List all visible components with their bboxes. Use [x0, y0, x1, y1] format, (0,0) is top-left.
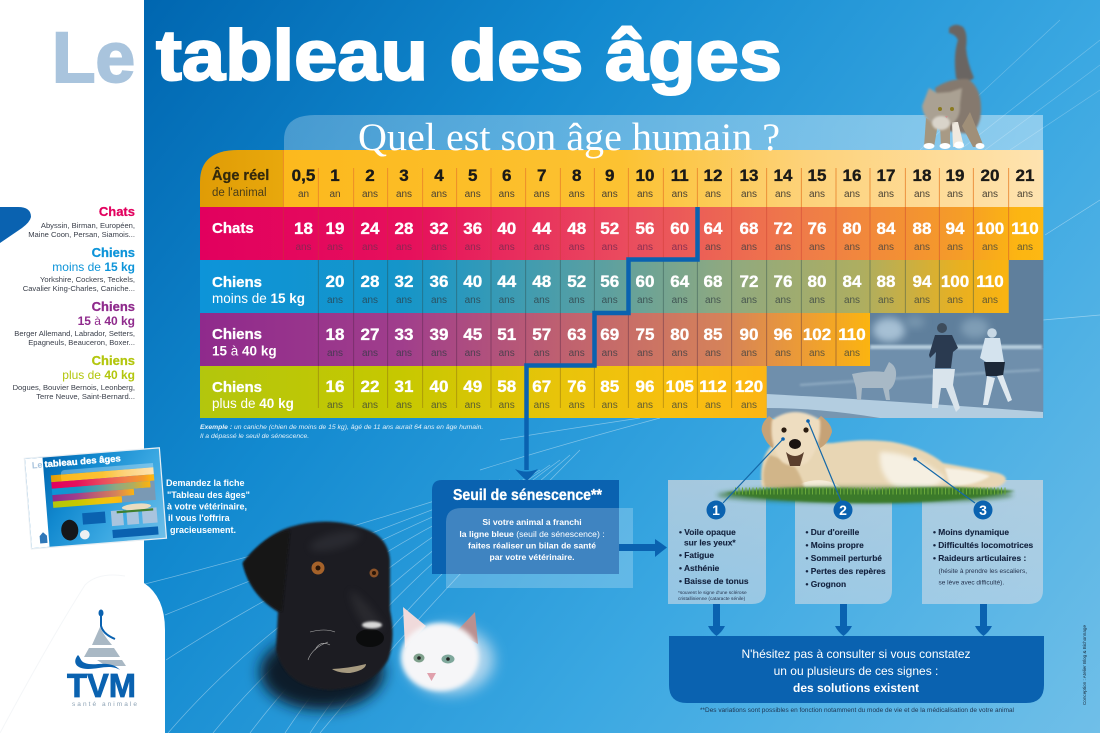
row: dogs 15 to 40 kg: 39 [430, 325, 448, 344]
row: dogs under 15 kg: 110 [976, 272, 1004, 291]
call to action text [166, 478, 250, 535]
panel: signs 1 [668, 480, 766, 604]
row: dogs 15 to 40 kg: 45 [463, 325, 482, 344]
legend item: dogs over 40 kg: Chiens [92, 353, 135, 368]
legend item: dogs 15 to 40 kg: Berger Allemand, Labrador, Setters, [14, 329, 135, 338]
header row: real age: 0,5 [292, 166, 315, 185]
arrow: signs 2 to advice [835, 604, 852, 636]
row: dogs 15 to 40 kg: ans [705, 348, 721, 359]
advice panel: un ou plusieurs de ces signes : [774, 664, 938, 678]
row: dogs 15 to 40 kg: ans [569, 348, 585, 359]
row: dogs under 15 kg: ans [947, 295, 963, 306]
legend tab [0, 207, 31, 243]
row: dogs 15 to 40 kg: ans [844, 348, 860, 359]
age table [200, 150, 1043, 418]
advice panel [669, 636, 1044, 703]
row: cats: 100 [976, 219, 1004, 238]
row: dogs under 15 kg: 40 [463, 272, 482, 291]
header row: real age: 8 [572, 166, 581, 185]
row: dogs over 40 kg: ans [569, 400, 585, 411]
header row: real age: ans [396, 189, 412, 200]
row: dogs under 15 kg: 28 [361, 272, 379, 291]
header row: real age: de l'animal [212, 187, 267, 199]
photo: white cat [401, 607, 494, 694]
row: dogs under 15 kg: 56 [600, 272, 619, 291]
row: dogs 15 to 40 kg: 80 [670, 325, 689, 344]
header row: real age: ans [637, 189, 653, 200]
row: dogs under 15 kg: ans [327, 295, 343, 306]
row: dogs under 15 kg: ans [878, 295, 894, 306]
row: cats: ans [982, 242, 998, 253]
row: cats: 60 [670, 219, 689, 238]
row: dogs under 15 kg: ans [705, 295, 721, 306]
table example note: Exemple : un caniche (chien de moins de 15 kg), âgé de 11 ans aurait 64 ans en âge humain. [200, 424, 483, 431]
row: cats: 44 [532, 219, 552, 238]
row: cats: 72 [774, 219, 792, 238]
legend item: cats: Maine Coon, Persan, Siamois... [28, 230, 135, 239]
row: cats: ans [809, 242, 825, 253]
header row: real age: an [329, 189, 341, 200]
header row: real age: 7 [537, 166, 546, 185]
row: dogs under 15 kg: ans [362, 295, 378, 306]
row: cats: 52 [600, 219, 619, 238]
legend item: cats: Chats [99, 204, 135, 219]
panel: signs 2 [795, 480, 892, 604]
row: dogs 15 to 40 kg: ans [534, 348, 550, 359]
row: cats: 19 [326, 219, 344, 238]
header row: real age: ans [431, 189, 447, 200]
header row: real age [200, 150, 1043, 207]
icon: tabby cat on the table [922, 25, 984, 149]
row: dogs 15 to 40 kg [200, 313, 870, 366]
row: dogs 15 to 40 kg: ans [602, 348, 618, 359]
row: dogs 15 to 40 kg: 33 [395, 325, 413, 344]
legend item: dogs over 40 kg: plus de 40 kg [62, 368, 135, 382]
arrow: threshold to signs [619, 539, 667, 557]
logo arc outline [0, 575, 125, 733]
header row: real age: ans [1017, 189, 1033, 200]
row: dogs under 15 kg: 20 [326, 272, 344, 291]
panel: signs 3: se lève avec difficulté). [938, 580, 1004, 586]
call to action text: à votre vétérinaire, [167, 502, 247, 512]
row: cats: 40 [497, 219, 516, 238]
panel: signs 3: • Raideurs articulaires : [933, 553, 1026, 563]
mini poster thumbnail: Le [31, 460, 43, 470]
header row: real age: 10 [636, 166, 654, 185]
row: dogs 15 to 40 kg: 85 [704, 325, 722, 344]
legend item: dogs under 15 kg [23, 245, 135, 293]
row: dogs under 15 kg: ans [465, 295, 481, 306]
row: dogs over 40 kg: ans [705, 400, 721, 411]
connector lines and number badge 3: 3 [979, 502, 987, 518]
logo: TVM [67, 610, 137, 708]
row: dogs under 15 kg: 48 [532, 272, 551, 291]
row: dogs over 40 kg: ans [431, 400, 447, 411]
row: cats: ans [844, 242, 860, 253]
row: dogs under 15 kg: 60 [636, 272, 654, 291]
row: dogs 15 to 40 kg: ans [362, 348, 378, 359]
header row: real age: ans [672, 189, 688, 200]
row: cats: 64 [704, 219, 723, 238]
row: dogs 15 to 40 kg: ans [465, 348, 481, 359]
row: dogs over 40 kg: ans [396, 400, 412, 411]
row: cats: 18 [294, 219, 313, 238]
row: dogs under 15 kg: 68 [704, 272, 722, 291]
mini poster thumbnail: tableau des âges [44, 453, 121, 469]
row: dogs under 15 kg: ans [844, 295, 860, 306]
row: dogs 15 to 40 kg: 63 [567, 325, 586, 344]
header row: real age: ans [705, 189, 721, 200]
row: dogs 15 to 40 kg: ans [775, 348, 791, 359]
row: cats: ans [396, 242, 412, 253]
legend item: dogs 15 to 40 kg: 15 à 40 kg [78, 314, 135, 328]
row: cats: 68 [740, 219, 758, 238]
row: dogs over 40 kg: 67 [532, 377, 551, 396]
panel: signs 1: • Baisse de tonus [679, 576, 749, 586]
table example note: Il a dépassé le seuil de sénescence. [200, 433, 309, 440]
header row: real age: ans [465, 189, 481, 200]
row: dogs over 40 kg: 120 [735, 377, 763, 396]
row: dogs over 40 kg: ans [362, 400, 378, 411]
row: dogs over 40 kg: ans [637, 400, 653, 411]
row: dogs 15 to 40 kg: ans [499, 348, 515, 359]
legend item: dogs over 40 kg [13, 353, 135, 401]
header row: real age: ans [569, 189, 585, 200]
photo: black dog [243, 522, 393, 710]
row: dogs under 15 kg: 80 [808, 272, 826, 291]
row: dogs under 15 kg: 36 [430, 272, 448, 291]
header row: real age: ans [741, 189, 757, 200]
panel: signs 1: *souvent le signe d'une sclérose [678, 590, 747, 596]
row: dogs under 15 kg: ans [499, 295, 515, 306]
row: cats: ans [295, 242, 312, 253]
legend item: cats [28, 204, 135, 239]
row: dogs under 15 kg: ans [914, 295, 930, 306]
header row: real age: 17 [877, 166, 895, 185]
header row: real age: 3 [399, 166, 409, 185]
connector lines and number badge 2: 2 [839, 502, 847, 518]
row: cats: ans [569, 242, 585, 253]
row: cats: ans [602, 242, 618, 253]
row: dogs 15 to 40 kg: ans [809, 348, 825, 359]
row: dogs 15 to 40 kg: 102 [803, 325, 831, 344]
legend item: dogs under 15 kg: Cavalier King-Charles, Caniche... [23, 284, 135, 293]
translucent panel behind subtitle [284, 115, 1043, 160]
row: dogs under 15 kg: ans [982, 295, 998, 306]
row: dogs over 40 kg: 58 [497, 377, 516, 396]
title: tableau des âges: tableau des âges [156, 17, 782, 96]
row: dogs 15 to 40 kg: 90 [740, 325, 758, 344]
panel: signs 3 [922, 480, 1043, 604]
row: cats: ans [465, 242, 481, 253]
row: dogs over 40 kg: ans [499, 400, 515, 411]
row: dogs under 15 kg: ans [741, 295, 757, 306]
row: dogs 15 to 40 kg: 57 [532, 325, 551, 344]
row: cats: ans [878, 242, 894, 253]
row: dogs under 15 kg: ans [396, 295, 412, 306]
panel: signs 1: cristallinienne (cataracte sénile) [678, 596, 746, 602]
advice panel: des solutions existent [793, 681, 919, 695]
panel: signs 1: • Voile opaque [679, 527, 736, 537]
row: dogs over 40 kg: 31 [395, 377, 413, 396]
senescence threshold panel: Seuil de sénescence** [453, 487, 603, 504]
row: dogs under 15 kg: ans [569, 295, 585, 306]
header row: real age: 16 [843, 166, 861, 185]
senescence threshold panel: par votre vétérinaire. [489, 552, 575, 562]
row: dogs under 15 kg: ans [809, 295, 825, 306]
header row: real age: 15 [808, 166, 826, 185]
row: dogs 15 to 40 kg: ans [396, 348, 412, 359]
row: dogs 15 to 40 kg: Chiens [212, 326, 262, 343]
connector lines and number badge 1: 1 [712, 502, 720, 518]
senescence threshold panel: la ligne bleue (seuil de sénescence) : [459, 529, 605, 539]
header row: real age: an [298, 189, 309, 200]
row: dogs over 40 kg: 85 [600, 377, 619, 396]
row: dogs under 15 kg: 100 [941, 272, 969, 291]
row: cats: ans [947, 242, 963, 253]
header row: real age: 11 [671, 166, 689, 185]
header row: real age: 21 [1016, 166, 1034, 185]
header row: real age: 5 [468, 166, 477, 185]
row: cats: Chats [212, 220, 254, 237]
row: dogs over 40 kg: 22 [361, 377, 379, 396]
row: cats: ans [362, 242, 378, 253]
row: cats [200, 207, 1043, 260]
header row: real age: ans [499, 189, 515, 200]
logo: TVM: TVM [67, 667, 136, 704]
row: dogs 15 to 40 kg: 18 [326, 325, 344, 344]
row: dogs under 15 kg: ans [534, 295, 550, 306]
row: dogs 15 to 40 kg: 75 [636, 325, 654, 344]
vertical credit: Conception : Atelier Blog & Bichonnage [1082, 625, 1087, 705]
row: dogs over 40 kg: 105 [666, 377, 694, 396]
row: dogs 15 to 40 kg: 51 [497, 325, 516, 344]
row: dogs over 40 kg: ans [602, 400, 618, 411]
row: dogs under 15 kg: 52 [567, 272, 586, 291]
header row: real age: ans [947, 189, 963, 200]
row: dogs 15 to 40 kg: 69 [600, 325, 619, 344]
row: dogs over 40 kg: ans [465, 400, 481, 411]
header row: real age: 18 [913, 166, 931, 185]
panel: signs 1: • Fatigue [679, 550, 714, 560]
header row: real age: 6 [502, 166, 511, 185]
row: dogs 15 to 40 kg: ans [327, 348, 343, 359]
row: cats: 110 [1011, 219, 1039, 238]
legend item: dogs 15 to 40 kg [14, 299, 135, 347]
header row: real age: 14 [774, 166, 793, 185]
row: cats: ans [672, 242, 688, 253]
row: cats: ans [1017, 242, 1033, 253]
panel: signs 1: • Asthénie [679, 563, 720, 573]
panel: signs 3: (hésite à prendre les escaliers, [938, 568, 1027, 575]
row: cats: 84 [877, 219, 896, 238]
row: dogs under 15 kg: 72 [740, 272, 758, 291]
row: cats: ans [534, 242, 550, 253]
row: dogs over 40 kg: 40 [430, 377, 448, 396]
row: dogs 15 to 40 kg: 96 [774, 325, 792, 344]
row: dogs under 15 kg: ans [637, 295, 653, 306]
row: dogs over 40 kg: plus de 40 kg [212, 396, 294, 411]
row: dogs over 40 kg: ans [672, 400, 688, 411]
call to action text: Demandez la fiche [166, 478, 245, 488]
header row: real age: ans [878, 189, 894, 200]
header row: real age: ans [809, 189, 825, 200]
legend item: dogs under 15 kg: Yorkshire, Cockers, Teckels, [40, 275, 135, 284]
row: dogs under 15 kg [200, 260, 1009, 313]
row: dogs over 40 kg: Chiens [212, 379, 262, 396]
row: dogs 15 to 40 kg: 110 [838, 325, 866, 344]
row: dogs under 15 kg: ans [602, 295, 618, 306]
row: dogs over 40 kg: ans [327, 400, 343, 411]
connector lines and number badge 3 [913, 457, 992, 520]
logo: TVM: santé animale [72, 701, 137, 708]
panel: signs 1: sur les yeux* [684, 538, 736, 548]
footnote: **Des variations sont possibles en fonction notamment du mode de vie et de la médicalisation de votre animal [700, 707, 1015, 714]
row: dogs over 40 kg: 96 [636, 377, 654, 396]
row: dogs over 40 kg [200, 366, 767, 418]
header row: real age: Âge réel [212, 166, 269, 184]
header row: real age: ans [844, 189, 860, 200]
header row: real age: 12 [704, 166, 722, 185]
row: dogs under 15 kg: 84 [843, 272, 862, 291]
row: cats: ans [775, 242, 791, 253]
row: cats: ans [705, 242, 721, 253]
row: cats: ans [914, 242, 930, 253]
blue senescence threshold line and arrow [515, 207, 698, 481]
row: dogs 15 to 40 kg: 27 [361, 325, 379, 344]
row: dogs 15 to 40 kg: ans [672, 348, 688, 359]
row: cats: 48 [567, 219, 586, 238]
row: dogs over 40 kg: 76 [567, 377, 586, 396]
call to action text: gracieusement. [170, 525, 236, 535]
row: cats: ans [741, 242, 757, 253]
row: dogs under 15 kg: ans [672, 295, 688, 306]
row: cats: 94 [946, 219, 965, 238]
panel: signs 2: • Moins propre [806, 540, 864, 550]
row: cats: ans [499, 242, 515, 253]
header row: real age: ans [534, 189, 550, 200]
row: dogs 15 to 40 kg: 15 à 40 kg [212, 344, 277, 358]
header row: real age: ans [914, 189, 930, 200]
header row: real age: ans [362, 189, 378, 200]
header row: real age: ans [982, 189, 998, 200]
header row: real age: 19 [946, 166, 964, 185]
row: dogs under 15 kg: 94 [913, 272, 932, 291]
row: dogs over 40 kg: ans [741, 400, 757, 411]
photo: runners and dog behind the table [766, 260, 1044, 420]
photo: golden dog on grass [717, 412, 1015, 503]
row: cats: ans [431, 242, 447, 253]
header row: real age: 13 [740, 166, 758, 185]
row: cats: 32 [430, 219, 448, 238]
panel: signs 2: • Dur d'oreille [806, 527, 860, 537]
row: cats: 88 [913, 219, 931, 238]
row: dogs under 15 kg: ans [431, 295, 447, 306]
white left panel [0, 0, 165, 733]
header row: real age: ans [775, 189, 791, 200]
row: dogs over 40 kg: 16 [326, 377, 344, 396]
legend item: dogs 15 to 40 kg: Chiens [92, 299, 135, 314]
panel: signs 3: • Difficultés locomotrices [933, 540, 1034, 550]
legend item: dogs 15 to 40 kg: Epagneuls, Beauceron, Boxer... [28, 338, 135, 347]
title: Le: Le [52, 19, 135, 98]
row: dogs 15 to 40 kg: ans [741, 348, 757, 359]
connector lines and number badge 1 [706, 437, 785, 520]
row: dogs under 15 kg: 32 [395, 272, 413, 291]
row: dogs under 15 kg: 44 [497, 272, 517, 291]
row: dogs under 15 kg: 64 [670, 272, 690, 291]
call to action text: il vous l'offrira [168, 513, 231, 523]
header row: real age: 1 [330, 166, 340, 185]
mini poster thumbnail [24, 447, 167, 549]
row: dogs 15 to 40 kg: ans [431, 348, 447, 359]
row: cats: 80 [843, 219, 861, 238]
senescence threshold panel [432, 480, 633, 588]
legend item: dogs under 15 kg: moins de 15 kg [52, 260, 135, 274]
senescence threshold panel: Si votre animal a franchi [482, 517, 582, 527]
row: cats: 24 [361, 219, 380, 238]
row: dogs 15 to 40 kg: ans [637, 348, 653, 359]
row: dogs under 15 kg: Chiens [212, 274, 262, 291]
header row: real age: 20 [981, 166, 999, 185]
row: cats: ans [637, 242, 653, 253]
panel: signs 2: • Pertes des repères [806, 566, 886, 576]
legend item: dogs over 40 kg: Dogues, Bouvier Bernois, Leonberg, [13, 383, 135, 392]
legend: breeds by category [13, 204, 135, 401]
panel: signs 2: • Grognon [806, 579, 846, 589]
arrow: signs 1 to advice [708, 604, 725, 636]
row: cats: 56 [636, 219, 654, 238]
header row: real age: ans [602, 189, 618, 200]
panel: signs 3: • Moins dynamique [933, 527, 1009, 537]
legend item: cats: Abyssin, Birman, Européen, [41, 221, 135, 230]
panel: signs 2: • Sommeil perturbé [806, 553, 882, 563]
legend item: dogs under 15 kg: Chiens [92, 245, 135, 260]
row: cats: 76 [808, 219, 826, 238]
row: dogs under 15 kg: 76 [774, 272, 792, 291]
header row: real age: 2 [365, 166, 375, 185]
connector lines and number badge 2 [806, 419, 852, 520]
row: cats: ans [327, 242, 343, 253]
header row: real age: 4 [434, 166, 444, 185]
row: dogs under 15 kg: 88 [877, 272, 895, 291]
row: dogs over 40 kg: 49 [463, 377, 482, 396]
row: dogs over 40 kg: ans [534, 400, 550, 411]
row: dogs over 40 kg: 112 [699, 377, 727, 396]
legend item: dogs over 40 kg: Terre Neuve, Saint-Bernard... [36, 392, 135, 401]
row: dogs under 15 kg: moins de 15 kg [212, 291, 305, 306]
row: cats: 36 [463, 219, 482, 238]
subtitle: Quel est son âge humain ? [358, 116, 780, 159]
advice panel: N'hésitez pas à consulter si vous constatez [741, 647, 971, 661]
row: dogs under 15 kg: ans [775, 295, 791, 306]
arrow: signs 3 to advice [975, 604, 992, 636]
header row: real age: 9 [605, 166, 614, 185]
row: cats: 28 [395, 219, 413, 238]
call to action text: "Tableau des âges" [167, 490, 250, 500]
senescence threshold panel: faites réaliser un bilan de santé [468, 540, 596, 550]
